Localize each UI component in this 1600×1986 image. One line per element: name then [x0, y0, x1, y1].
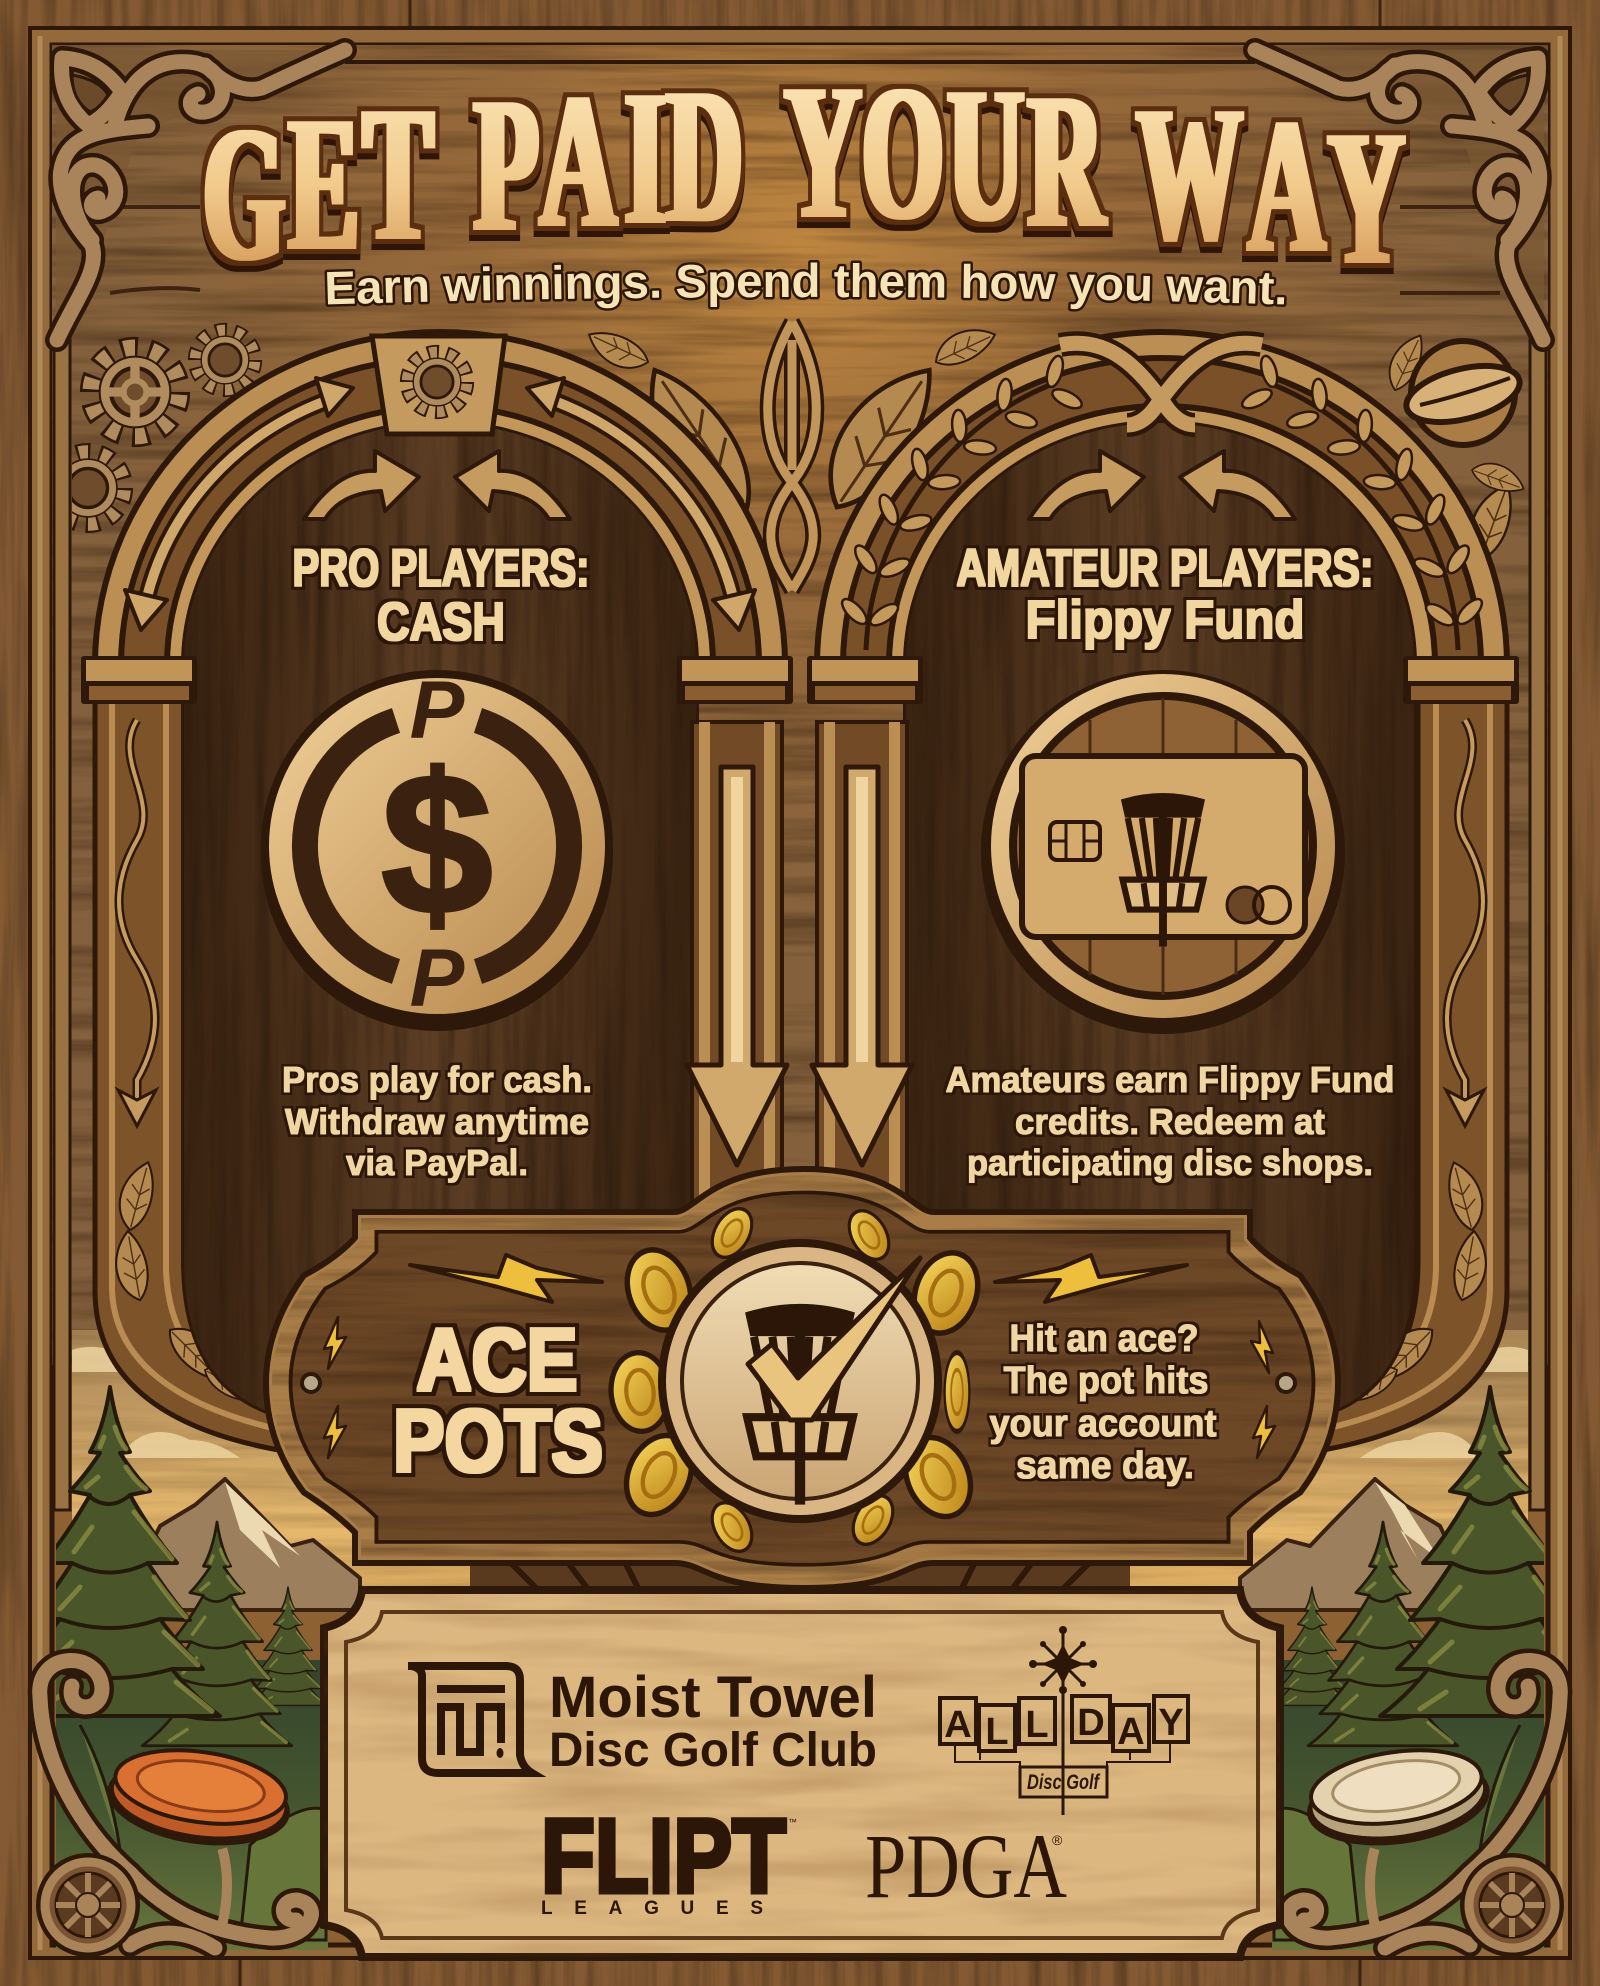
pillar capitals — [81, 656, 1519, 704]
ace pots text: The pot hits — [1004, 1360, 1208, 1402]
text: pro description: via PayPal. — [346, 1142, 528, 1183]
logo: pdga: ® — [1052, 1832, 1063, 1848]
text: pro description — [282, 1059, 592, 1183]
ornament: disc and leaves, top right — [1381, 329, 1528, 565]
text: amateur description: Amateurs earn Flippy Fund — [946, 1059, 1394, 1100]
subtitle: Earn winnings. Spend them how you want. — [324, 260, 1287, 312]
rivets — [302, 1374, 1295, 1392]
forest panels — [0, 1387, 1600, 1950]
gold coins — [605, 1199, 992, 1561]
text: pro description: Pros play for cash. — [282, 1059, 592, 1100]
icon: dollar coin: $ — [381, 733, 493, 956]
panel: pro players arch — [92, 329, 788, 1430]
logo: all day disc golf — [940, 1626, 1188, 1815]
wheat decoration — [836, 350, 1488, 650]
ace pots text: Hit an ace? — [1010, 1318, 1198, 1360]
logo: all day disc golf: A — [1117, 1711, 1145, 1753]
small arrows — [304, 451, 570, 519]
icon: orange disc — [90, 1740, 297, 1937]
heading: pro players: CASH — [377, 592, 505, 652]
logo: flipt leagues: ™ — [788, 1817, 797, 1827]
bottom corner scrollwork — [39, 1661, 1561, 1954]
text: amateur description: participating disc shops. — [967, 1142, 1373, 1183]
ace pots text: same day. — [1016, 1445, 1194, 1487]
logo: all day disc golf: L — [985, 1711, 1009, 1753]
center big arrows — [687, 722, 912, 1222]
logo: all day disc golf: D — [1077, 1702, 1105, 1744]
heading: pro players — [292, 539, 590, 652]
crossing vines — [1060, 343, 1262, 425]
title: GET PAID YOUR WAY — [203, 45, 1405, 304]
wooden board — [52, 45, 1548, 1365]
logo: all day disc golf: Y — [1158, 1702, 1184, 1744]
arch arrows — [125, 378, 755, 630]
ace pots text: your account — [990, 1403, 1217, 1445]
logo: pdga: PDGA — [865, 1815, 1067, 1917]
logo: all day disc golf: A — [944, 1704, 972, 1746]
heading: amateur players — [956, 539, 1374, 650]
panel: sponsors plaque — [324, 1590, 1280, 1957]
ace pots heading — [393, 1310, 603, 1490]
icon: flippy fund card — [981, 670, 1345, 1034]
icon: dollar coin: P — [410, 665, 465, 756]
logo: all day disc golf: L — [1025, 1704, 1049, 1746]
logo: moist towel — [408, 1665, 877, 1777]
landscape: sky and mountains — [72, 1330, 1528, 1610]
icon: white disc — [1300, 1740, 1507, 1937]
icon: basket medallion with check — [658, 1239, 942, 1523]
top corner scrollwork — [56, 50, 1544, 340]
logo: flipt leagues: LEAGUES — [541, 1898, 763, 1919]
icon: dollar coin — [261, 665, 613, 1031]
ace pots heading: POTS — [393, 1391, 603, 1490]
small arrows — [1029, 451, 1295, 519]
heading: amateur players: Flippy Fund — [1026, 590, 1304, 650]
logo: all day disc golf: Disc Golf — [1027, 1771, 1101, 1794]
panel: ace pots plaque — [270, 1175, 1334, 1582]
keystone — [372, 336, 505, 434]
gears — [53, 331, 254, 523]
panel: amateur players arch — [814, 329, 1510, 1430]
logo: moist towel: Disc Golf Club — [549, 1724, 877, 1777]
ace pots text — [990, 1318, 1217, 1487]
text: amateur description: credits. Redeem at — [1015, 1101, 1325, 1142]
center vine and leaves — [582, 320, 1000, 590]
logo: flipt leagues: FLIPT — [541, 1798, 786, 1915]
frame rails — [54, 340, 1546, 1510]
icon: dollar coin: P — [410, 933, 465, 1024]
side bands — [95, 665, 1507, 1452]
moist towel mark — [408, 1666, 532, 1773]
text: amateur description — [946, 1059, 1394, 1183]
heading: amateur players: AMATEUR PLAYERS: — [956, 539, 1374, 598]
ace pots heading: ACE — [416, 1310, 578, 1409]
roots under ace plaque — [470, 1550, 1130, 1594]
text: pro description: Withdraw anytime — [285, 1101, 589, 1142]
heading: pro players: PRO PLAYERS: — [292, 539, 590, 598]
lightning bolts — [324, 1255, 1275, 1458]
logo: moist towel: Moist Towel — [549, 1665, 877, 1730]
